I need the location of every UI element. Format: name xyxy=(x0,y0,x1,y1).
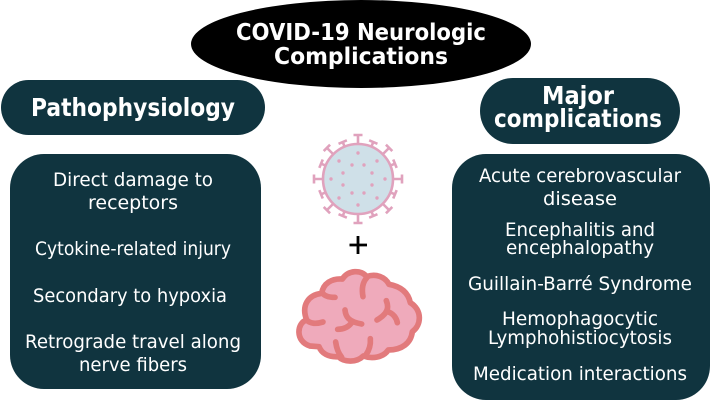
icon: brain xyxy=(299,272,419,361)
panel: pathophysiology list: Secondary to hypoxia xyxy=(33,285,227,307)
panel: pathophysiology list: Retrograde travel along xyxy=(25,331,241,353)
heading: Major complications: Major xyxy=(542,81,615,110)
title xyxy=(191,0,531,88)
heading: Major complications: complications xyxy=(494,104,662,133)
panel: pathophysiology list: nerve fibers xyxy=(79,354,187,376)
panel: pathophysiology list: Cytokine-related injury xyxy=(35,238,231,260)
panel: major complications list xyxy=(452,154,710,400)
title: COVID-19 Neurologic xyxy=(236,20,486,46)
panel: pathophysiology list: Direct damage to xyxy=(53,169,213,191)
panel: major complications list: Hemophagocytic xyxy=(502,308,658,330)
panel: major complications list: disease xyxy=(543,188,617,210)
panel: major complications list: Acute cerebrovascular xyxy=(479,165,681,187)
heading: Pathophysiology xyxy=(1,80,265,135)
panel: major complications list: Medication interactions xyxy=(473,363,687,385)
panel: major complications list: Encephalitis and xyxy=(505,219,655,241)
title: Complications xyxy=(274,44,448,70)
icon: virus xyxy=(314,135,402,223)
heading: Pathophysiology: Pathophysiology xyxy=(31,93,235,122)
panel: major complications list: encephalopathy xyxy=(506,237,654,259)
panel: pathophysiology list: receptors xyxy=(88,192,178,214)
panel: major complications list: Lymphohistiocytosis xyxy=(488,327,672,349)
icon: plus sign xyxy=(350,236,367,254)
panel: major complications list: Guillain-Barré Syndrome xyxy=(468,273,692,295)
panel: pathophysiology list xyxy=(10,154,261,389)
heading: Major complications xyxy=(480,78,680,144)
